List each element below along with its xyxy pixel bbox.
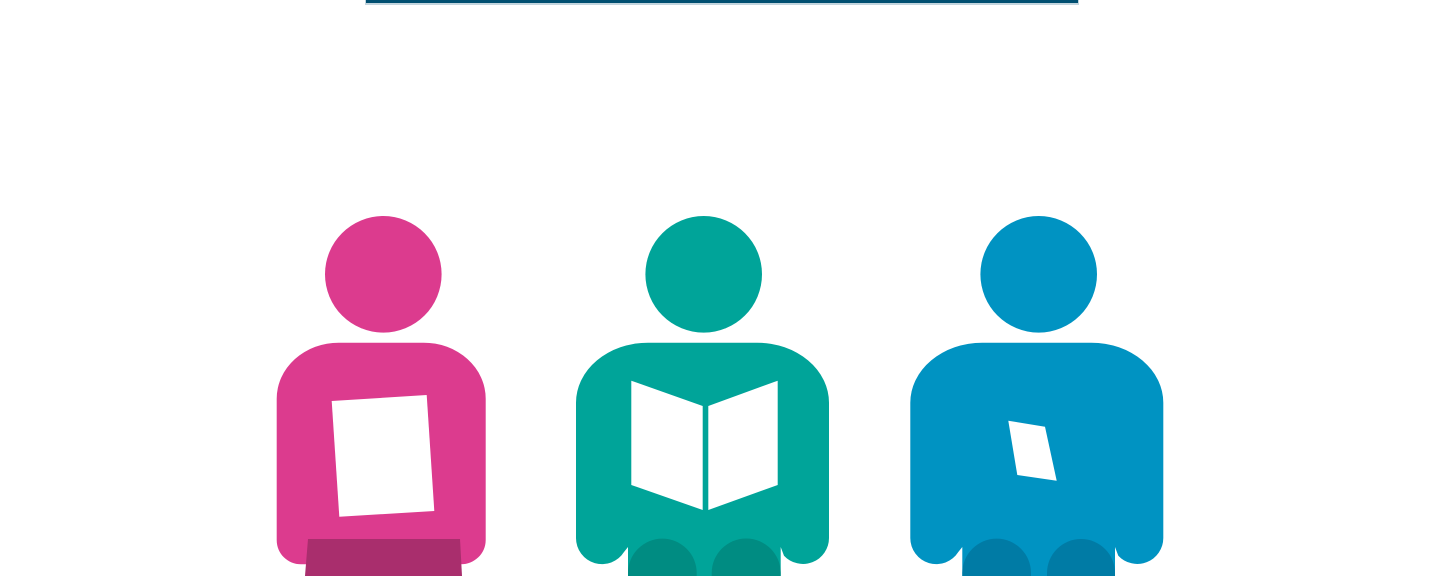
icon: white sheet of paper [332, 395, 434, 517]
icon: blue head [980, 216, 1097, 333]
icon: small white device [1008, 421, 1057, 481]
icon: green head [645, 216, 762, 333]
icon: blue body [910, 343, 1163, 576]
icon: pink body [277, 343, 486, 564]
icon: dark green knees [628, 538, 781, 576]
figure: green person reading an open book [576, 216, 829, 576]
icon: dark blue knees [962, 539, 1115, 576]
icon: green body [576, 343, 829, 576]
figure: blue person reading a small phone [910, 216, 1163, 576]
icon: open white book [631, 381, 778, 510]
icon: dark pink lap [305, 539, 462, 576]
figure: pink person reading a sheet of paper [277, 216, 486, 576]
icon: pink head [325, 216, 442, 333]
top banner edge [365, 0, 1079, 5]
